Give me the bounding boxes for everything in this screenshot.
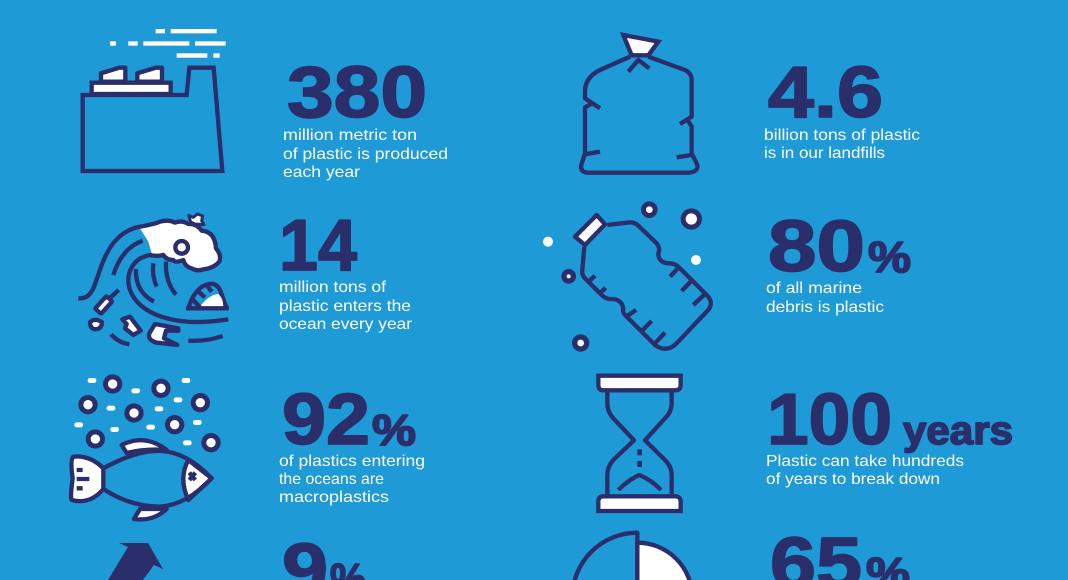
stat: 380 million metric ton — [283, 53, 448, 181]
stat: 100 years: Plastic can take hundreds — [766, 453, 964, 470]
stat: 4.6 billion tons — [764, 53, 920, 162]
stat: 92% macroplastics: % — [372, 406, 416, 455]
stat: 80% marine debris: % — [868, 233, 911, 282]
stat: 380 million metric ton: each year — [283, 164, 361, 181]
icon: garbage bag — [581, 35, 697, 173]
icon: factory — [83, 29, 226, 171]
stat: 92% macroplastics: macroplastics — [279, 489, 389, 506]
stat: 9% — [282, 530, 366, 580]
stat: 92% macroplastics — [279, 380, 425, 506]
stat: 65% — [770, 524, 910, 580]
stat: 14 million tons: plastic enters the — [279, 298, 411, 315]
stat: 4.6 billion tons: is in our landfills — [764, 145, 885, 162]
icon: upward arrow, cropped — [108, 543, 163, 580]
icon: hourglass — [598, 376, 681, 511]
stat: 92% macroplastics: 92 — [282, 380, 370, 460]
stat: 14 million tons: ocean every year — [279, 316, 413, 333]
stat: 80% marine debris: 80 — [768, 207, 865, 287]
stat: 380 million metric ton: million metric ton — [283, 127, 417, 144]
icon: dead fish with microplastics — [71, 374, 221, 519]
stat: 380 million metric ton: 380 — [287, 53, 427, 133]
icon: wave with plastic debris — [78, 214, 229, 345]
stat: 100 years: years — [903, 409, 1013, 453]
stat: 92% macroplastics: the oceans are — [279, 471, 384, 488]
stat: 80% marine debris — [766, 207, 911, 316]
stat: 14 million tons: million tons of — [279, 279, 387, 296]
stat: 92% macroplastics: of plastics entering — [279, 453, 425, 470]
stat: 100 years: of years to break down — [766, 471, 940, 488]
stat: 380 million metric ton: of plastic is produced — [283, 146, 448, 163]
stat: 80% marine debris: debris is plastic — [766, 299, 884, 316]
icon: plastic bottle with bubbles — [543, 201, 711, 352]
icon: pie chart — [572, 533, 692, 580]
stat: 4.6 billion tons: billion tons of plastic — [764, 127, 920, 144]
stat: 4.6 billion tons: 4.6 — [768, 53, 883, 133]
stat: 100 years — [766, 380, 1013, 488]
stat: 100 years: 100 — [767, 380, 892, 460]
stat: 14 million tons: 14 — [279, 206, 357, 286]
stat: 80% marine debris: of all marine — [766, 280, 862, 297]
stat: 14 million tons — [279, 206, 413, 333]
